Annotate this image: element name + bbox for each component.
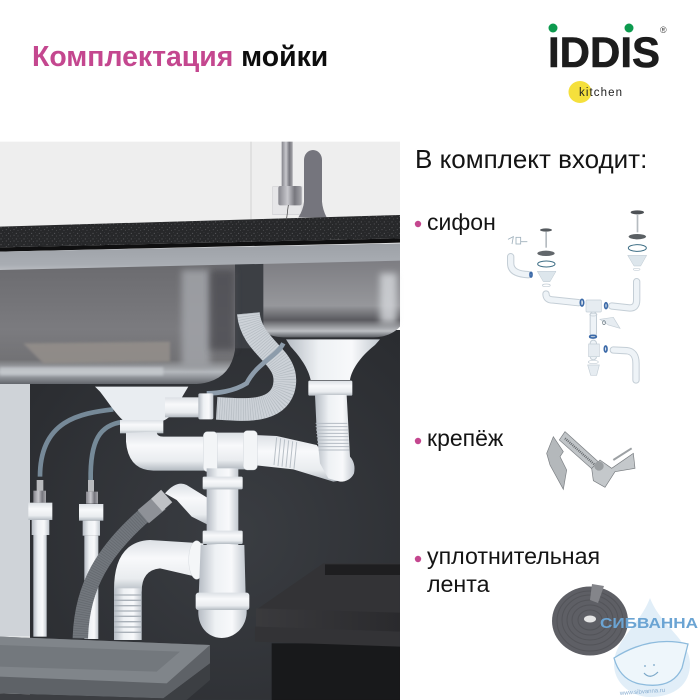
tee fitting [203, 431, 257, 472]
countertop [0, 215, 400, 252]
watermark bathtub [614, 641, 688, 685]
bullet: siphon [415, 221, 421, 227]
fastener clip icon [547, 432, 635, 489]
bullet: sealing tape [415, 556, 421, 562]
sealing tape roll [552, 584, 628, 656]
watermark url: www.sibvanna.ru [619, 688, 665, 697]
label: siphon: сифон [427, 209, 496, 235]
thin blue hose behind [207, 343, 283, 393]
watermark: Sibvanna [600, 598, 699, 697]
watermark water drop [614, 598, 690, 697]
title: Комплектация мойки [32, 41, 328, 73]
siphon strainers [537, 210, 646, 256]
right drain funnel [286, 339, 380, 380]
bullet: fastener [415, 438, 421, 444]
left P-trap elbow [126, 432, 213, 471]
label: fastener: крепёж [427, 425, 504, 451]
logo green dot left [548, 24, 558, 32]
wall behind sink [30, 330, 400, 700]
corrugated outlet elbow [114, 540, 205, 640]
centre gap between bowls [232, 262, 263, 348]
grey drain hose [80, 496, 167, 638]
corrugated branch to tee [253, 435, 343, 482]
vertical stem [207, 468, 238, 545]
siphon sealing rings [538, 245, 646, 267]
left drain funnel [95, 387, 188, 421]
white siphon side elbow [165, 484, 208, 525]
logo kitchen word: kitchen [579, 87, 623, 99]
left bowl reflections [0, 270, 235, 375]
stem ring upper [203, 477, 243, 489]
left side panel [0, 363, 30, 637]
stem ring lower [203, 531, 243, 544]
right bowl [255, 258, 400, 337]
siphon small rings [542, 268, 640, 364]
faucet [251, 142, 327, 219]
water inlet fitting right [79, 480, 103, 639]
corrugated overflow hose upper [217, 313, 285, 410]
logo green dot right [624, 24, 634, 32]
right bowl highlight [380, 273, 397, 323]
siphon tee and trap parts [586, 300, 620, 375]
logo wordmark: IDDIS [548, 29, 660, 77]
cabinet wall [0, 142, 400, 232]
bottle trap body [199, 545, 246, 597]
bottle trap band [196, 593, 249, 610]
left drain side connector [165, 393, 213, 419]
siphon blue gaskets [530, 272, 607, 352]
siphon small overflow grille [508, 237, 527, 244]
bottle trap cup [198, 610, 247, 638]
logo yellow spot [568, 81, 592, 103]
black tray right [255, 563, 400, 700]
label: sealing tape: лента [427, 571, 490, 597]
watermark face [644, 664, 658, 676]
water inlet fitting left [28, 480, 52, 637]
siphon exploded diagram [508, 210, 647, 380]
left drain collar [120, 420, 163, 433]
right drain collar [308, 381, 352, 396]
right drain corrugated pipe [315, 395, 354, 482]
label: sealing tape: уплотнительная [427, 543, 600, 569]
sink rim [0, 243, 400, 270]
logo: IDDIS kitchen [548, 24, 667, 103]
siphon funnels [537, 255, 647, 282]
logo registered mark: ® [660, 25, 667, 35]
siphon pipes [511, 257, 637, 380]
photo: sink underside with plumbing [0, 142, 400, 700]
blue flexible hoses [40, 409, 123, 480]
left bowl [0, 263, 235, 384]
watermark name: СИБВАННА [600, 616, 699, 632]
subtitle: package contents: В комплект входит: [415, 144, 647, 174]
grey tray left [0, 637, 210, 700]
